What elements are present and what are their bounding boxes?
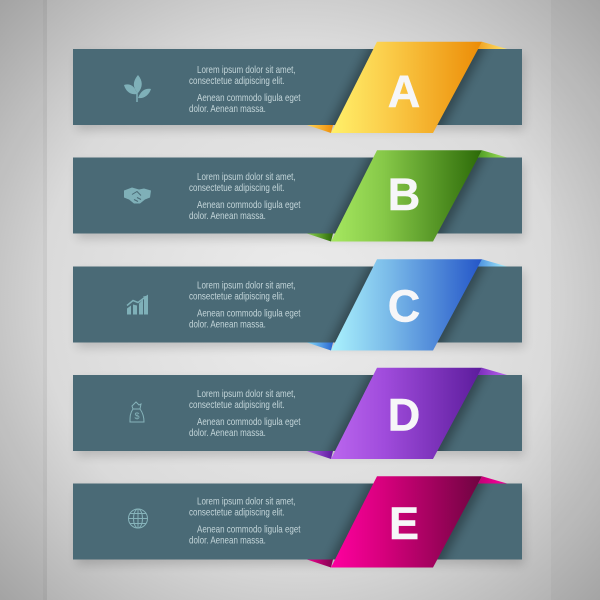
- text block: consectetue adipiscing elit.: [189, 291, 285, 302]
- letter: D: [388, 390, 420, 440]
- text block: consectetue adipiscing elit.: [189, 182, 285, 193]
- letter: A: [388, 66, 420, 117]
- icon: globe: [128, 509, 148, 528]
- text block: Lorem ipsum dolor sit amet,: [197, 388, 296, 399]
- letter: E: [389, 498, 419, 549]
- ribbon: [331, 368, 482, 459]
- text block: Lorem ipsum dolor sit amet,: [197, 64, 296, 75]
- text block: consectetue adipiscing elit.: [189, 507, 285, 518]
- icon: growth chart: [127, 294, 148, 314]
- text block: Aenean commodo ligula eget: [197, 416, 301, 427]
- text block: dolor. Aenean massa.: [189, 319, 266, 330]
- icon: money bag: [130, 402, 144, 422]
- panel: B: [73, 150, 524, 242]
- icon: money bag: $: [134, 411, 140, 421]
- text block: Lorem ipsum dolor sit amet,: [197, 496, 296, 507]
- ribbon: [331, 476, 482, 568]
- text block: dolor. Aenean massa.: [189, 535, 266, 546]
- text block: Aenean commodo ligula eget: [197, 92, 301, 103]
- ribbon fold right: [478, 476, 507, 484]
- text block: Lorem ipsum dolor sit amet,: [197, 280, 296, 291]
- text block: Lorem ipsum dolor sit amet,: [197, 171, 296, 182]
- text block: consectetue adipiscing elit.: [189, 75, 285, 86]
- panel: D: [73, 368, 524, 459]
- panel: E: [73, 476, 524, 568]
- text block: Aenean commodo ligula eget: [197, 308, 301, 319]
- letter: C: [388, 280, 420, 332]
- ribbon: [331, 42, 482, 133]
- panel: C: [73, 259, 524, 350]
- ribbon fold right: [478, 368, 507, 375]
- ribbon fold left: [307, 234, 333, 242]
- ribbon fold right: [478, 150, 507, 158]
- ribbon fold right: [478, 42, 507, 49]
- text block: Aenean commodo ligula eget: [197, 524, 301, 535]
- ribbon fold left: [307, 451, 333, 459]
- ribbon: [331, 259, 482, 350]
- text block: Aenean commodo ligula eget: [197, 199, 301, 210]
- text block: dolor. Aenean massa.: [189, 103, 266, 114]
- text block: consectetue adipiscing elit.: [189, 399, 285, 410]
- icon: handshake: [124, 188, 151, 204]
- ribbon fold left: [307, 125, 333, 133]
- ribbon fold right: [478, 259, 507, 266]
- ribbon fold left: [307, 342, 333, 350]
- panel: A: [73, 42, 524, 133]
- ribbon fold left: [307, 560, 333, 568]
- icon: leaf: [124, 75, 151, 102]
- ribbon: [331, 150, 482, 242]
- letter: B: [388, 169, 420, 220]
- text block: dolor. Aenean massa.: [189, 210, 266, 221]
- text block: dolor. Aenean massa.: [189, 427, 266, 438]
